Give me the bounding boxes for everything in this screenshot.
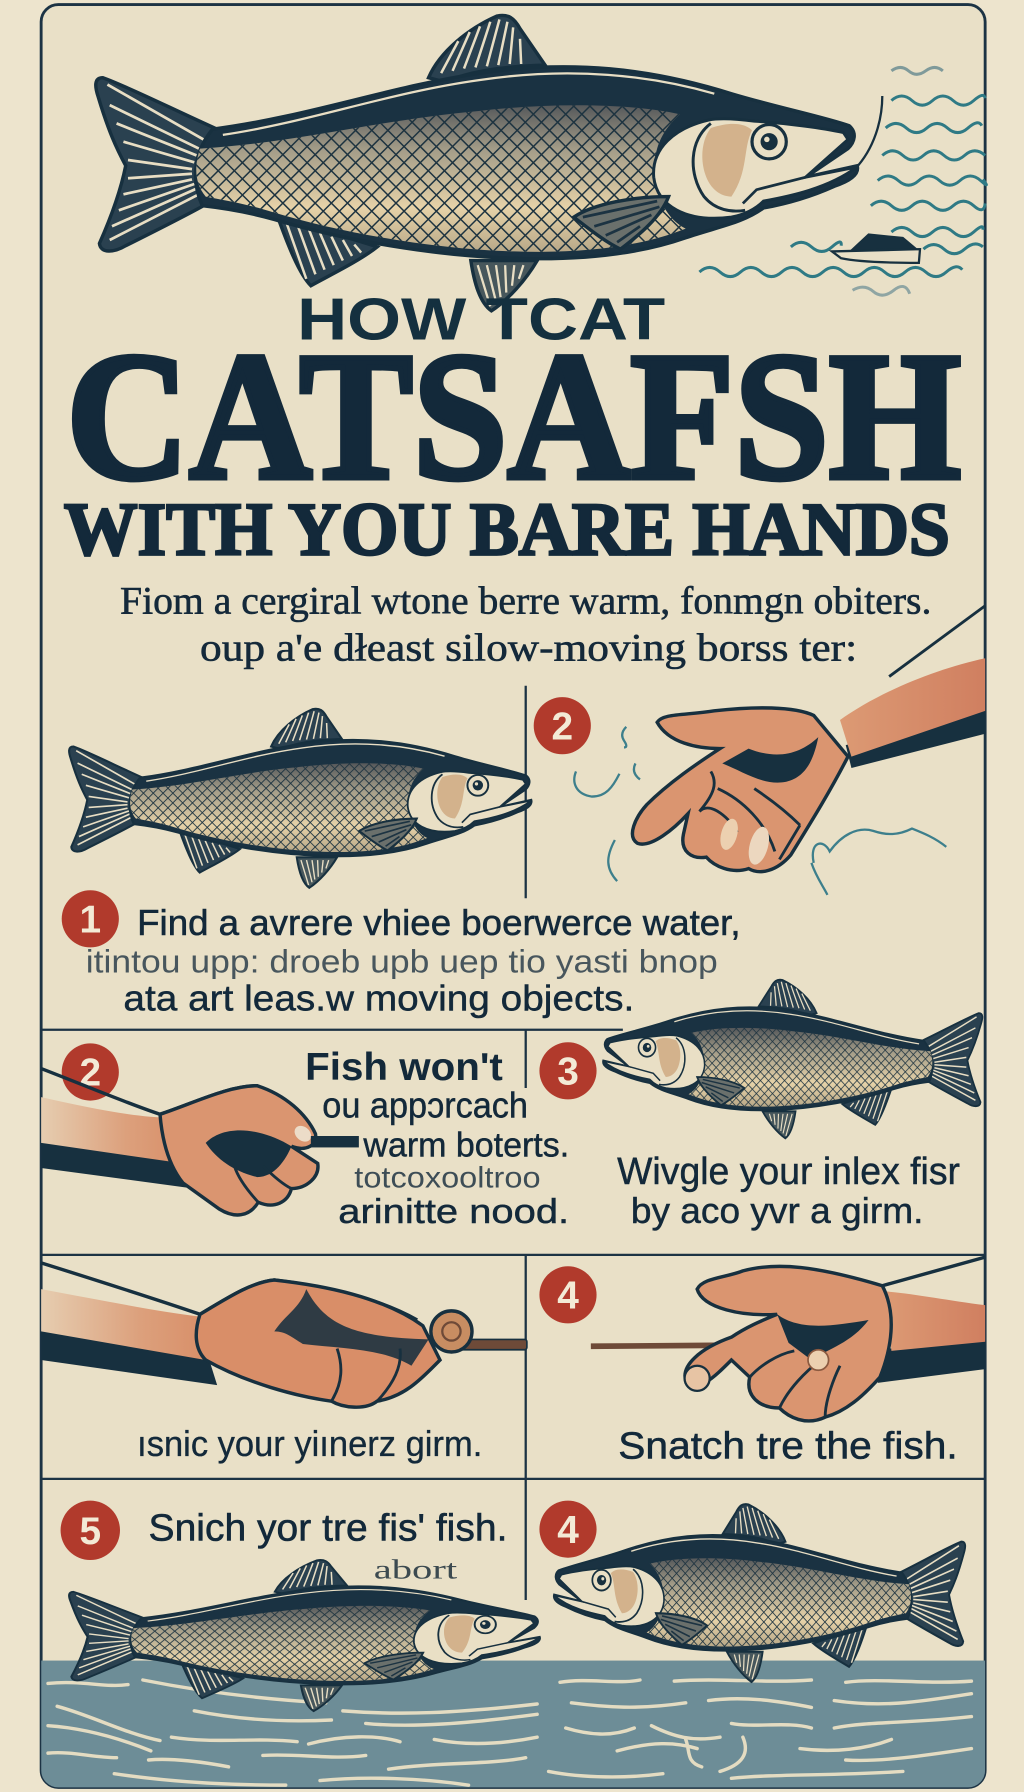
- last number badge: 4: [557, 1509, 579, 1552]
- arm: [878, 1339, 985, 1383]
- fist: [196, 1280, 440, 1407]
- hand with rod, left panel row 3: [41, 1263, 527, 1407]
- hand with rod, right panel row 3: [591, 1257, 985, 1421]
- water band: [41, 1661, 985, 1789]
- step 1 number badge: 1: [79, 899, 101, 942]
- step 2 text: [305, 1046, 569, 1231]
- step 1 text: [86, 902, 741, 1018]
- step 2 top number badge: [534, 697, 591, 754]
- step 3 text: by aco yvr a girm.: [631, 1190, 923, 1231]
- fishing line from the hero fish mouth: [855, 96, 882, 169]
- rod: [591, 1345, 743, 1346]
- hand: [160, 1086, 318, 1215]
- arm: [41, 1141, 194, 1189]
- step 3 number badge: 3: [557, 1051, 579, 1094]
- panel divider lines: [41, 686, 985, 1600]
- step 2 text: arinitte nood.: [338, 1193, 569, 1231]
- step 2 top number badge: 2: [551, 705, 573, 748]
- step 3 text: [617, 1150, 960, 1231]
- step 4 number badge: 4: [557, 1275, 579, 1318]
- fish for step 1: [69, 709, 531, 888]
- intro line two: oup a'e dłeast silow-moving borss ter:: [200, 627, 857, 670]
- hand gripping, panel step 2: [41, 1069, 359, 1215]
- hand: [685, 1266, 891, 1421]
- step 1 text: ata art leas.w moving objects.: [123, 977, 634, 1018]
- last number badge: [539, 1501, 597, 1558]
- rod and reel: [451, 1339, 527, 1350]
- step 4 number badge: [539, 1266, 597, 1323]
- step 1 number badge: [62, 890, 119, 947]
- fish for last panel: [554, 1504, 965, 1682]
- small caption: abort: [374, 1554, 458, 1584]
- hand reaching, panel 2: [632, 606, 985, 872]
- arm: [41, 1329, 217, 1385]
- step 3 text: Wivgle your inlex fisr: [617, 1150, 960, 1192]
- step 2 text: warm boterts.: [362, 1127, 569, 1165]
- boat hull: [832, 249, 920, 263]
- hero fish illustration: [96, 15, 858, 311]
- loose water squiggles around hand, panel 2: [574, 727, 946, 895]
- step 5 text: Snich yor tre fis' fish.: [149, 1507, 507, 1549]
- step 2 text: ou appɔrcach: [322, 1085, 528, 1126]
- row 3 left text: ısnic your yiınerz girm.: [137, 1423, 482, 1464]
- palm and fingers: [632, 708, 848, 872]
- rod stub: [311, 1136, 359, 1147]
- step 2 number badge: [62, 1043, 119, 1101]
- step 1 text: itintou upp: droeb upb uep tio yasti bnop: [86, 944, 718, 980]
- step 3 number badge: [539, 1042, 597, 1099]
- title line three: WITH YOU BARE HANDS: [64, 488, 950, 571]
- step 2 text: totcoxooltroo: [354, 1161, 541, 1194]
- boat cabin: [851, 234, 917, 250]
- title main word: CATSAFSH: [66, 315, 961, 518]
- step 2 text: Fish won't: [305, 1046, 503, 1089]
- step 5 number badge: [61, 1501, 120, 1560]
- fish for step 5: [69, 1560, 540, 1711]
- intro line one: Fiom a cergiral wtone berre warm, fonmgn obiters.: [120, 580, 931, 623]
- step 1 text: Find a avrere vhiee boerwerce water,: [137, 902, 741, 943]
- water ripples and boat beside the hero fish: [699, 67, 986, 295]
- fish for step 3: [603, 980, 982, 1138]
- arm: [846, 709, 985, 768]
- title line one: HOW TCAT: [297, 285, 665, 352]
- row 3 right text: Snatch tre the fish.: [618, 1424, 958, 1466]
- step 2 number badge: 2: [79, 1052, 101, 1095]
- step 5 number badge: 5: [79, 1510, 101, 1553]
